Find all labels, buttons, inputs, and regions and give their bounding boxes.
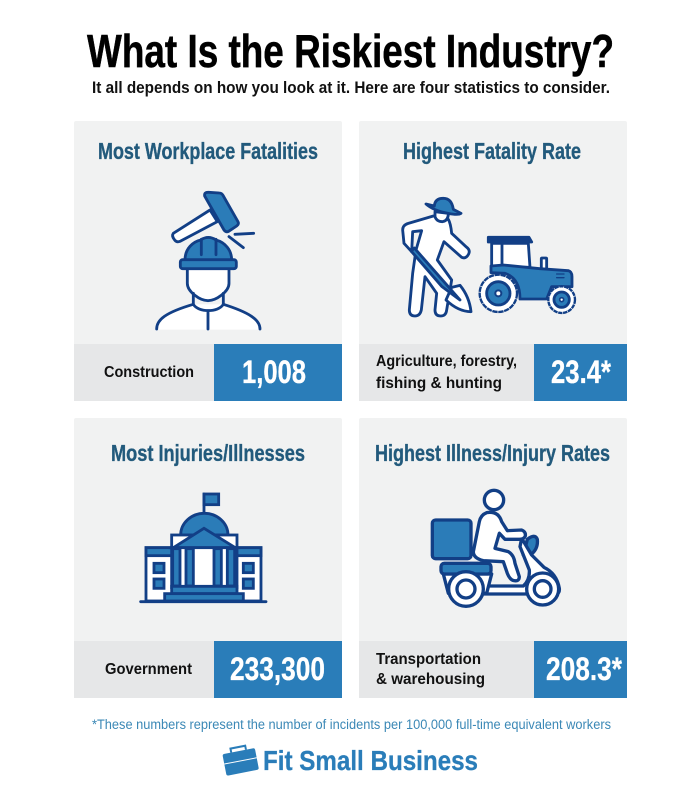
label: transportation and warehousing: & warehousing: [376, 671, 485, 688]
stat bar: transportation: [359, 641, 627, 698]
panel: most injuries and illnesses: [74, 418, 342, 698]
value: 1,008: 1,008: [242, 354, 306, 390]
stat bar: construction: [74, 344, 342, 401]
heading: highest fatality rate: Highest Fatality Rate: [403, 138, 581, 164]
value: 23.4*: 23.4*: [551, 354, 611, 390]
label: transportation and warehousing: Transportation: [376, 651, 481, 668]
label: government: Government: [105, 661, 193, 678]
value: 233,300: 233,300: [230, 651, 325, 687]
stat bar: government: [74, 641, 342, 698]
label: agriculture, forestry, fishing and hunting: fishing & hunting: [376, 375, 502, 392]
icon: delivery scooter rider: [432, 490, 559, 606]
stat bar: agriculture: [359, 344, 627, 401]
panel: most workplace fatalities: [74, 121, 342, 401]
heading: highest illness/injury rates: Highest Illness/Injury Rates: [375, 440, 610, 466]
icon: government building: [141, 494, 266, 602]
wordmark: Fit Small Business: [263, 745, 478, 776]
panel: highest illness and injury rates: [359, 418, 627, 698]
logo: Fit Small Business: [222, 744, 478, 776]
icon: briefcase: [222, 744, 259, 776]
footnote: *These numbers represent the number of incidents per 100,000 full-time equivalent workers: [92, 717, 611, 732]
icon: farmer with shovel and tractor: [403, 198, 575, 316]
label: construction: Construction: [104, 364, 194, 381]
value: 208.3*: 208.3*: [546, 651, 622, 687]
panel: highest fatality rate: [359, 121, 627, 401]
heading: most workplace fatalities: Most Workplace Fatalities: [98, 138, 318, 164]
heading: most injuries/illnesses: Most Injuries/Illnesses: [111, 440, 305, 466]
tractor: [480, 237, 575, 313]
subtitle: It all depends on how you look at it. Here are four statistics to consider.: [92, 79, 610, 97]
label: agriculture, forestry, fishing and hunting: Agriculture, forestry,: [376, 353, 517, 370]
icon: hammer striking a construction worker's hard hat: [157, 192, 260, 330]
